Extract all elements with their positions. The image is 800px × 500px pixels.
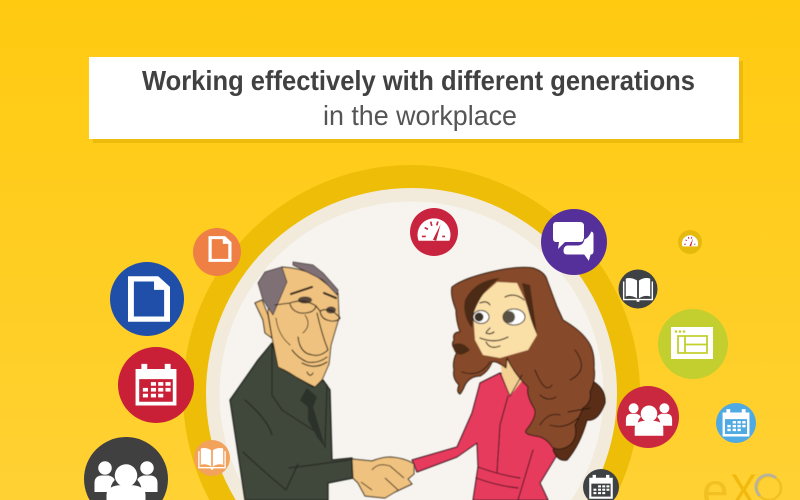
brows (291, 287, 336, 298)
icon: orange book (194, 440, 230, 476)
dress detail (476, 373, 533, 500)
title banner (89, 57, 743, 143)
illustration: handshake (352, 457, 414, 498)
logo: eXo (702, 464, 781, 500)
icon: orange document (193, 228, 241, 276)
neck (500, 352, 525, 396)
hair (258, 262, 338, 315)
title banner: Working effectively with different generations (142, 65, 695, 96)
icon: purple speech bubbles (541, 209, 607, 275)
icon: blue document (110, 262, 184, 336)
wrinkles (276, 315, 308, 380)
face (268, 267, 339, 387)
ear (255, 300, 272, 338)
icon: green layout window (658, 309, 728, 379)
illustration: older man (230, 262, 353, 500)
icon: dark calendar (583, 469, 619, 500)
hair shadow (452, 278, 537, 355)
icon: red people (617, 386, 679, 448)
tie (300, 388, 325, 447)
glasses (275, 301, 340, 321)
icon: dark people (84, 437, 168, 500)
hair (452, 267, 594, 449)
icon: dark book (618, 270, 658, 308)
eyes (473, 310, 489, 324)
face (473, 282, 537, 358)
panel: central circle (183, 165, 640, 500)
hair curl lines (462, 350, 590, 426)
illustration: young woman (412, 267, 605, 500)
eyes (298, 296, 312, 304)
jacket lines (243, 343, 350, 490)
jacket (230, 343, 353, 500)
nose and mouth (292, 313, 328, 375)
icon: small gold gauge (678, 230, 702, 254)
icon: blue calendar (716, 403, 756, 443)
back hair (553, 378, 605, 460)
icon: red gauge (410, 208, 458, 256)
icon: red calendar (118, 347, 194, 423)
dress (412, 373, 560, 500)
brows and mouth (480, 295, 524, 347)
title banner: in the workplace (323, 100, 517, 131)
